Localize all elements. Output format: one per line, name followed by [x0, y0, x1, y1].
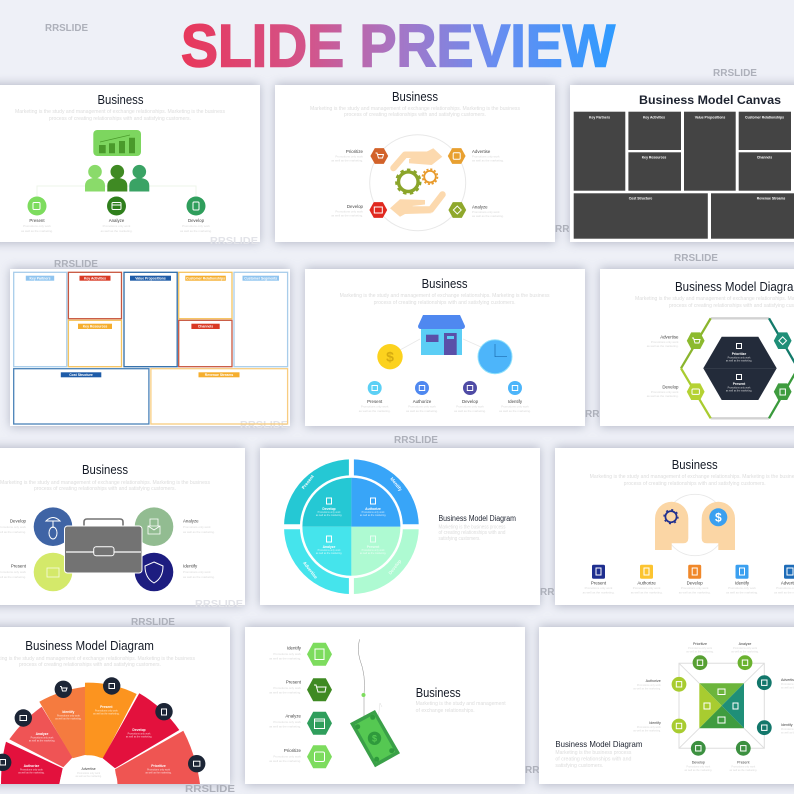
panel: slide 3 dark business model canvas [570, 85, 794, 242]
dark hexagon: Promotions only work [728, 386, 751, 390]
panel: slide 5 store: Marketing is the study and management of exchange relationships. Marketing is the business [340, 293, 550, 299]
item: analyze: as well as the marketing. [269, 724, 301, 728]
panel: slide 3 dark business model canvas: Customer Relationships [745, 116, 784, 120]
segment labels: Authorize [24, 764, 39, 768]
item: develop: as well as the marketing. [647, 394, 679, 398]
item: present: Promotions only work [23, 224, 51, 228]
item: develop: Develop [462, 399, 479, 404]
panel: slide 2 hands and gears: Marketing is the study and management of exchange relationships. Marketing is the business [310, 106, 521, 112]
panel: slide 9 two heads: process of creating relationships with and satisfying customers. [624, 481, 766, 487]
panel: slide 6 hexagon diagram [600, 269, 794, 426]
panel: slide 7 briefcase [0, 448, 245, 610]
item: develop: Promotions only work [335, 210, 364, 214]
item: authorize: Promotions only work [633, 586, 661, 590]
text block: Marketing is the business process [438, 524, 506, 530]
item: develop [647, 383, 705, 400]
item: analyze: Promotions only work [472, 210, 500, 214]
chart: quadrant circle: Identify [389, 476, 403, 492]
segment labels: Prioritize [151, 764, 166, 768]
panel: slide 3 dark business model canvas: Revenue Streams [757, 196, 785, 200]
chart: quadrant circle: Present [301, 474, 315, 490]
node labels [633, 642, 794, 772]
panel: slide 1 business team: process of creating relationships with and satisfying customers. [49, 116, 191, 122]
item: develop: Promotions only work [651, 390, 679, 394]
node labels: as well as the marketing. [731, 650, 759, 654]
node labels: Identify [649, 721, 661, 725]
item: develop [454, 381, 486, 413]
item: analyze: as well as the marketing. [183, 530, 215, 534]
chart: quadrant circle: Analyze [323, 545, 336, 549]
chip: channels [191, 324, 220, 329]
item: analyze: Promotions only work [273, 720, 302, 724]
item: analyze: as well as the marketing. [472, 214, 504, 218]
icons: dark badges [0, 677, 205, 772]
icons: outer circles [672, 655, 772, 756]
segment labels: Promotions only work [147, 768, 171, 772]
text block: Business Model Diagram [438, 514, 516, 523]
icon: clock [478, 340, 512, 374]
panel: slide 2 hands and gears: process of creating relationships with and satisfying customers. [344, 112, 486, 118]
node labels: Promotions only work [686, 766, 711, 768]
icon: banknote [350, 710, 400, 767]
panel: slide 9 two heads: Business [672, 458, 718, 472]
item: present: as well as the marketing. [583, 590, 615, 594]
watermarks: RRSLIDE [525, 764, 569, 776]
dark hexagon [703, 337, 777, 400]
text block [555, 739, 642, 769]
item: prioritize: Promotions only work [335, 154, 364, 158]
item: identify: Promotions only work [501, 404, 529, 408]
item: authorize [406, 381, 438, 413]
panel: slide 1 business team: Business [98, 93, 144, 107]
text block: of creating relationships with and [555, 756, 632, 762]
node labels: as well as the marketing. [685, 769, 712, 772]
item: analyze [448, 202, 504, 218]
item: analyze: Analyze [472, 204, 488, 210]
item: develop: Develop [188, 218, 205, 223]
item: identify [499, 381, 531, 413]
icon: bar chart board [93, 130, 141, 156]
item: advertise [774, 565, 794, 594]
node labels: Present [737, 760, 749, 764]
dark hexagon: as well as the marketing. [726, 360, 752, 362]
item: develop: Develop [347, 204, 364, 209]
segment labels: as well as the marketing. [55, 718, 82, 720]
segment labels: Promotions only work [128, 732, 151, 736]
item: identify: Identify [508, 399, 523, 404]
watermarks: RRSLIDE [394, 434, 438, 446]
item: advertise: as well as the marketing. [647, 344, 679, 348]
item: analyze: Promotions only work [103, 224, 131, 228]
item: develop: as well as the marketing. [331, 214, 363, 218]
icon: right head [702, 502, 735, 550]
item: analyze: Promotions only work [183, 525, 211, 529]
text block [438, 514, 516, 542]
item: prioritize: as well as the marketing. [269, 759, 301, 763]
item: develop: Develop [687, 580, 703, 586]
chip: revenue streams: Revenue Streams [205, 373, 233, 377]
item: prioritize: Promotions only work [273, 754, 302, 758]
chip: key resources: Key Resources [83, 325, 107, 329]
node labels: Authorize [646, 679, 661, 683]
icon: store [418, 315, 465, 355]
item: present [0, 564, 27, 579]
text block: Marketing is the study and management [416, 701, 506, 707]
segment labels: Promotions only work [31, 736, 54, 740]
item: present: Present [286, 680, 302, 684]
chip: customer segments: Customer Segments [244, 276, 277, 280]
text block: Business [416, 686, 461, 700]
dark hexagon: Prioritize [732, 352, 746, 356]
item: analyze [101, 196, 133, 233]
text block: of exchange relationships. [416, 708, 475, 714]
item: prioritize [331, 148, 388, 164]
item: develop [0, 518, 27, 534]
item: identify: as well as the marketing. [183, 575, 215, 579]
node labels: Promotions only work [731, 766, 756, 768]
item: develop [679, 565, 711, 594]
chip: key activities [80, 276, 110, 281]
item: prioritize: Prioritize [284, 748, 302, 753]
watermarks: RRSLIDE [713, 67, 757, 79]
panel: slide 7 briefcase: Marketing is the study and management of exchange relationships. Marketing is the business [0, 480, 211, 486]
item: present: Present [11, 564, 27, 568]
chart: fan segments [1, 683, 200, 784]
panel: slide 1 business team [0, 85, 260, 247]
item: analyze [183, 518, 215, 534]
segment labels: Identify [62, 710, 75, 714]
segment labels: as well as the marketing. [93, 712, 120, 716]
item: analyze: as well as the marketing. [101, 229, 133, 233]
icon: gears [396, 169, 438, 194]
chart: quadrant circle: Promotions only work [318, 549, 341, 552]
chart: quadrant circle: Advertise [302, 560, 319, 580]
item: advertise [647, 332, 705, 349]
panel: slide 9 two heads [555, 448, 794, 605]
dark hexagon: Promotions only work [728, 356, 751, 360]
item: present: Promotions only work [273, 686, 302, 690]
item: identify [183, 564, 215, 579]
item: identify: as well as the marketing. [499, 409, 531, 413]
node labels: Develop [692, 760, 705, 764]
panel: slide 5 store [305, 269, 585, 426]
segment labels: Present [100, 705, 113, 709]
panel: slide 10 fan diagram: process of creating relationships with and satisfying customers. [19, 662, 161, 668]
panel: slide 5 store: process of creating relationships with and satisfying customers. [374, 300, 516, 306]
item: develop: Promotions only work [182, 224, 210, 228]
chip: value propositions: Value Propositions [135, 276, 166, 280]
watermarks: RRSLIDE [131, 616, 175, 628]
panel: slide 1 business team: RRSLIDE [210, 235, 258, 247]
segment labels: Develop [132, 728, 146, 732]
circles [34, 507, 173, 591]
segment labels: as well as the marketing. [145, 772, 172, 774]
segment labels: Analyze [36, 732, 49, 736]
text block: Business Model Diagram [555, 739, 642, 749]
item: advertise [448, 148, 504, 164]
node labels: Analyze [739, 642, 751, 646]
watermarks: RRSLIDE [585, 408, 629, 420]
item: present [21, 196, 53, 233]
item: develop: Promotions only work [681, 586, 709, 590]
panel: slide 12 pyramid diagram [539, 627, 794, 784]
icon: hands [390, 148, 442, 217]
watermarks: RRSLIDE [540, 586, 584, 598]
item: identify: Promotions only work [728, 586, 756, 590]
item: present [359, 381, 391, 413]
panel: slide 11 money on hook [245, 627, 525, 784]
chip: channels: Channels [198, 325, 213, 329]
node labels: Identify [781, 723, 793, 727]
item: present: as well as the marketing. [269, 690, 301, 694]
segment labels: as well as the marketing. [75, 775, 102, 778]
panel: slide 4 colored business model canvas: RRSLIDE [240, 419, 288, 431]
item: authorize: Promotions only work [408, 404, 436, 408]
node labels: as well as the marketing. [633, 688, 661, 690]
panel: slide 3 dark business model canvas: Key Activities [643, 116, 665, 120]
item: present: Promotions only work [361, 404, 389, 408]
chart: quadrant circle: Develop [322, 507, 336, 511]
segment labels: Advertise [82, 767, 96, 771]
chart: quadrant circle: as well as the marketing. [316, 514, 342, 517]
panel: slide 9 two heads: Marketing is the study and management of exchange relationships. Marketing is the business [590, 474, 794, 480]
item: identify: Identify [735, 580, 750, 586]
panel: slide 7 briefcase: Business [82, 463, 128, 477]
panel: slide 2 hands and gears: Business [392, 90, 438, 104]
chart: quadrant circle: Promotions only work [318, 511, 341, 514]
item: identify: Promotions only work [183, 570, 211, 574]
dark hexagon: as well as the marketing. [726, 390, 752, 392]
panel: slide 3 dark business model canvas: Key Partners [589, 116, 610, 120]
item: identify [726, 565, 758, 594]
watermarks: RRSLIDE [45, 22, 88, 34]
node labels: as well as the marketing. [633, 730, 661, 732]
panel: slide 3 dark business model canvas: Business Model Canvas [639, 93, 781, 107]
node labels: Promotions only work [637, 684, 662, 687]
item: prioritize [269, 745, 332, 768]
panel: slide 5 store: Business [422, 277, 468, 291]
watermarks: RRSLIDE [674, 252, 718, 264]
panel: slide 7 briefcase: RRSLIDE [195, 598, 243, 610]
item: present: Present [29, 218, 45, 223]
item: analyze [269, 712, 332, 735]
item: develop: as well as the marketing. [454, 409, 486, 413]
chip: cost structure: Cost Structure [69, 373, 93, 377]
node labels: Promotions only work [637, 726, 662, 729]
item: develop [180, 196, 212, 233]
icon: right hexagons [774, 332, 792, 400]
item: develop: as well as the marketing. [180, 229, 212, 233]
item: identify: as well as the marketing. [269, 656, 301, 660]
text block: Marketing is the business process [555, 750, 632, 756]
panel: slide 10 fan diagram: Business Model Diagram [25, 639, 154, 653]
segment labels: as well as the marketing. [18, 772, 45, 774]
panel: slide 3 dark business model canvas: Cost Structure [629, 196, 652, 200]
icon: briefcase [64, 519, 142, 573]
watermarks: RRSLIDE [555, 223, 599, 235]
chart: quadrant circle: as well as the marketing. [360, 514, 386, 517]
item: present: Present [591, 580, 607, 586]
node labels: as well as the marketing. [730, 769, 757, 772]
chip: cost structure [61, 372, 101, 377]
panel: slide 10 fan diagram [0, 627, 230, 784]
item: present: Promotions only work [585, 586, 613, 590]
panel: slide 4 colored business model canvas [10, 269, 290, 431]
panel: slide 3 dark business model canvas: Value Propositions [695, 116, 725, 120]
item: present: as well as the marketing. [21, 229, 53, 233]
chart: quadrant circle: Develop [387, 558, 402, 576]
text block: satisfying customers. [555, 763, 603, 769]
item: identify: as well as the marketing. [726, 590, 758, 594]
chart: quadrant circle: Promotions only work [362, 511, 385, 514]
item: develop: Promotions only work [456, 404, 484, 408]
segment labels: Promotions only work [95, 710, 119, 712]
text block: satisfying customers. [438, 536, 480, 542]
chart: quadrant circle: Promotions only work [362, 549, 385, 552]
item: identify: Identify [287, 646, 302, 650]
item: authorize: Authorize [637, 580, 656, 586]
segment labels: Promotions only work [20, 768, 44, 772]
chart: quadrant circle: Present [367, 545, 380, 549]
item: authorize: as well as the marketing. [631, 590, 663, 594]
chip: key activities: Key Activities [84, 276, 106, 280]
item: present [269, 678, 332, 701]
panel: slide 8 circular diagram [260, 448, 540, 605]
chart: quadrant circle: Authorize [365, 507, 381, 511]
item: advertise: Advertise [472, 149, 491, 154]
node labels: Promotions only work [688, 647, 713, 650]
item: analyze: Analyze [285, 714, 302, 718]
chip: key resources [78, 324, 112, 329]
item: advertise: Advertise [660, 334, 679, 340]
chart: quadrant circle [280, 455, 422, 598]
watermarks: RRSLIDE [54, 258, 98, 270]
icon: fishing line [358, 639, 382, 720]
item: authorize: as well as the marketing. [406, 409, 438, 413]
icon: banknote: $ [372, 734, 377, 744]
item: analyze: Analyze [183, 518, 199, 524]
text block: of creating relationships with and [438, 530, 506, 536]
item: present: as well as the marketing. [359, 409, 391, 413]
segment labels: Promotions only work [57, 714, 81, 718]
item: advertise: as well as the marketing. [472, 158, 504, 162]
item: identify: Promotions only work [273, 652, 302, 656]
item: authorize: Authorize [413, 399, 432, 404]
title: SLIDE PREVIEW [181, 12, 615, 79]
icon: three people [85, 165, 149, 192]
item: develop: as well as the marketing. [679, 590, 711, 594]
segment labels: as well as the marketing. [126, 736, 152, 738]
chip: key partners [26, 276, 54, 281]
icon: coin: $ [386, 348, 394, 364]
node labels: Prioritize [693, 642, 707, 646]
text block [416, 686, 506, 714]
chart: quadrant circle: as well as the marketing. [360, 552, 386, 555]
chart: quadrant circle: as well as the marketing. [316, 552, 342, 555]
dark hexagon: Present [733, 382, 746, 386]
item: identify [269, 643, 332, 666]
segment labels [18, 705, 172, 778]
icon: left head [655, 502, 688, 550]
chip: value propositions [130, 276, 171, 281]
item: develop [331, 202, 387, 218]
chip: customer relationships: Customer Relationships [186, 276, 225, 280]
item: present: Present [367, 399, 383, 404]
icon: coin [377, 344, 403, 369]
item: analyze: Analyze [109, 218, 125, 223]
item: develop: Develop [662, 384, 679, 390]
panel: slide 3 dark business model canvas: Channels [757, 156, 772, 160]
item: advertise: Promotions only work [472, 154, 500, 158]
node labels: as well as the marketing. [686, 650, 714, 654]
panel: slide 2 hands and gears [275, 85, 555, 242]
item: prioritize: as well as the marketing. [331, 158, 363, 162]
item: present [583, 565, 615, 594]
segment labels: as well as the marketing. [29, 740, 55, 742]
chip: revenue streams [198, 372, 240, 377]
icon: right head: $ [715, 510, 722, 524]
item: authorize [631, 565, 663, 594]
item: advertise: Promotions only work [651, 340, 679, 344]
panel: slide 1 business team: Marketing is the study and management of exchange relationships. Marketing is the business [15, 109, 226, 115]
node labels: Promotions only work [733, 647, 758, 650]
panel: slide 3 dark business model canvas: Key Resources [642, 156, 666, 160]
panel: slide 7 briefcase: process of creating relationships with and satisfying customers. [34, 486, 176, 492]
chip: key partners: Key Partners [30, 276, 51, 280]
item: develop: Develop [10, 518, 27, 524]
chart: central square [699, 683, 744, 728]
segment labels: Promotions only work [77, 772, 101, 775]
item: identify: Identify [183, 564, 198, 568]
item: prioritize: Prioritize [346, 149, 364, 154]
